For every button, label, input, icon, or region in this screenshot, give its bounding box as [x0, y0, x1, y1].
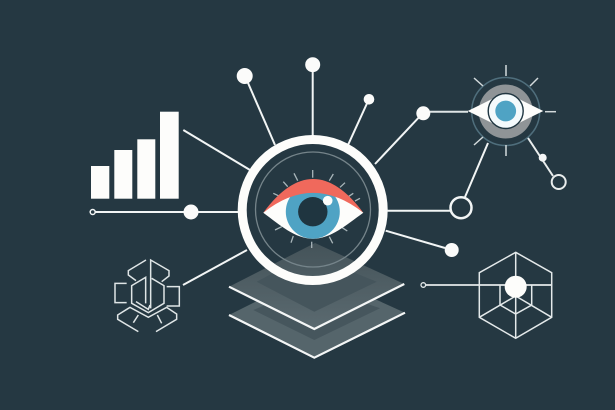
connector lines and nodes: top: [237, 57, 374, 145]
hub ring: [242, 140, 383, 280]
small node chain: [528, 138, 566, 189]
iris: [286, 185, 340, 239]
connector: hub to lower-right node: [386, 231, 459, 257]
icon: line-art hexagon module: [115, 260, 179, 332]
connector: slider to hub: [90, 204, 240, 220]
pupil: [298, 197, 327, 226]
connector: hub to upper-right eye: [375, 106, 468, 164]
connector: bar chart to hub: [183, 130, 250, 170]
stacked layers: [229, 243, 405, 358]
eye white: [263, 188, 363, 239]
layer: lower: [229, 272, 405, 358]
central eye hub: [242, 140, 383, 280]
bar chart: [91, 112, 179, 199]
layer: upper: [229, 243, 404, 329]
icon: upper-right eye: [468, 65, 556, 156]
connector: hub to open circle node: [387, 143, 488, 218]
eye rays: [273, 170, 360, 248]
eye lid: [263, 179, 363, 213]
thin inner ring: [256, 152, 370, 267]
connector: line icon to hub: [183, 250, 247, 285]
icon: wireframe cube with node: [421, 252, 552, 338]
highlight: [323, 196, 333, 206]
